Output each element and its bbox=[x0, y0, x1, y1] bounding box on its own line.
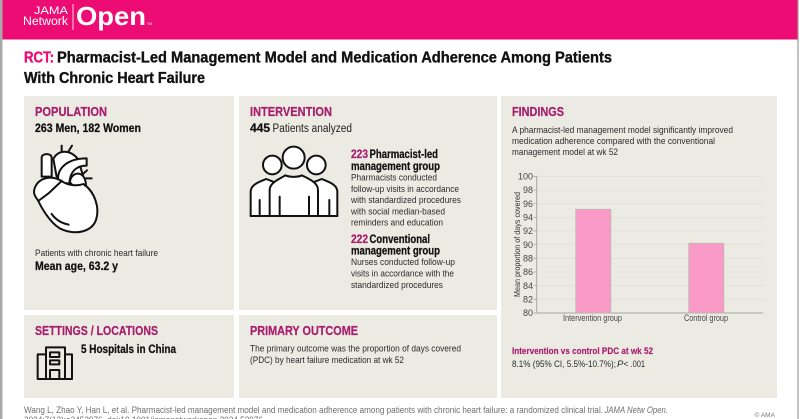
statistic result: .001 bbox=[630, 359, 645, 370]
mean age: Mean age, 63.2 y bbox=[35, 261, 119, 273]
primary outcome text bbox=[250, 344, 461, 366]
conventional group: standardized procedures bbox=[351, 280, 443, 291]
header banner bbox=[2, 0, 798, 40]
patients analyzed: 445 bbox=[250, 123, 271, 135]
y axis labels: 92 bbox=[523, 226, 533, 236]
panel: intervention bbox=[239, 96, 497, 310]
logo: JAMA Network Open: TM bbox=[147, 22, 152, 26]
y axis title: Mean proportion of days covered bbox=[512, 192, 522, 297]
patient description: Patients with chronic heart failure bbox=[35, 248, 158, 259]
y axis labels: 90 bbox=[523, 240, 533, 250]
conventional group: visits in accordance with the bbox=[351, 268, 454, 280]
primary outcome text: The primary outcome was the proportion of days covered bbox=[250, 344, 461, 355]
title bbox=[24, 50, 612, 87]
pharmacist-led group: reminders and education bbox=[351, 218, 443, 229]
pharmacist-led group: 223 bbox=[351, 149, 368, 161]
panel: settings / locations bbox=[24, 315, 234, 398]
bar chart bbox=[512, 172, 763, 323]
conventional group bbox=[351, 234, 455, 291]
findings text: medication adherence compared with the conventional bbox=[512, 136, 715, 147]
heading: primary outcome: PRIMARY OUTCOME bbox=[250, 324, 358, 338]
findings text: A pharmacist-led management model significantly improved bbox=[512, 125, 733, 136]
y axis labels: 84 bbox=[523, 281, 533, 291]
pharmacist-led group: follow-up visits in accordance bbox=[351, 184, 459, 195]
heading: population: POPULATION bbox=[35, 105, 107, 119]
y axis labels: 98 bbox=[523, 185, 533, 195]
pharmacist-led group: Pharmacists conducted bbox=[351, 172, 437, 184]
statistic heading: Intervention vs control PDC at wk 52 bbox=[512, 346, 653, 357]
panel: primary outcome bbox=[239, 315, 497, 398]
hospital count: 5 Hospitals in China bbox=[81, 344, 177, 356]
y axis labels: 94 bbox=[523, 212, 533, 222]
panel: findings bbox=[501, 96, 777, 398]
pharmacist-led group: Pharmacist-led bbox=[370, 149, 438, 161]
population counts: 263 Men, 182 Women bbox=[35, 123, 141, 135]
bar: intervention group bbox=[576, 209, 611, 313]
logo: JAMA Network Open: JAMA bbox=[34, 5, 69, 17]
findings text bbox=[512, 125, 733, 158]
conventional group: 222 bbox=[351, 234, 368, 246]
citation: JAMA Netw Open. bbox=[604, 405, 668, 415]
statistic result: 8.1% (95% CI, 5.5%-10.7%); bbox=[512, 359, 616, 370]
statistic result: < bbox=[624, 359, 629, 370]
icon: hospital bbox=[38, 347, 72, 379]
statistic result: P bbox=[617, 359, 624, 370]
x axis labels bbox=[563, 313, 728, 323]
y axis labels bbox=[518, 172, 533, 318]
bar: control group bbox=[689, 243, 724, 313]
logo: JAMA Network Open: Open bbox=[76, 1, 146, 31]
conventional group: management group bbox=[351, 246, 440, 258]
pharmacist-led group bbox=[350, 149, 461, 229]
findings text: management model at wk 52 bbox=[512, 147, 618, 158]
y axis labels: 96 bbox=[523, 199, 533, 209]
icon: group of people bbox=[251, 147, 337, 216]
heading: findings: FINDINGS bbox=[512, 105, 564, 119]
x axis labels: Intervention group bbox=[563, 313, 622, 323]
logo: JAMA Network Open bbox=[23, 1, 152, 31]
conventional group: Nurses conducted follow-up bbox=[351, 257, 455, 268]
panel: population bbox=[24, 96, 234, 310]
logo: JAMA Network Open: Network bbox=[23, 16, 68, 28]
pharmacist-led group: with social median-based bbox=[350, 206, 445, 218]
y axis labels: 86 bbox=[523, 267, 533, 277]
x axis labels: Control group bbox=[684, 313, 728, 323]
title: With Chronic Heart Failure bbox=[24, 70, 205, 87]
y axis labels: 80 bbox=[523, 308, 533, 318]
citation: Wang L, Zhao Y, Han L, et al. Pharmacist-led management model and medication adherence among patients with chronic heart failure: a randomized clinical trial. bbox=[24, 405, 603, 415]
y axis labels: 88 bbox=[523, 254, 533, 264]
patients analyzed: Patients analyzed bbox=[272, 123, 352, 135]
heading: intervention: INTERVENTION bbox=[250, 105, 332, 119]
primary outcome text: (PDC) by heart failure medication at wk 52 bbox=[250, 355, 404, 366]
title: Pharmacist-Led Management Model and Medication Adherence Among Patients bbox=[57, 50, 612, 66]
pharmacist-led group: management group bbox=[351, 161, 440, 173]
title: RCT: bbox=[24, 50, 54, 66]
y axis labels: 82 bbox=[523, 294, 533, 304]
icon: heart bbox=[34, 146, 97, 232]
y axis labels: 100 bbox=[518, 172, 533, 182]
copyright: © AMA bbox=[754, 411, 776, 419]
conventional group: Conventional bbox=[370, 234, 430, 246]
pharmacist-led group: with standardized procedures bbox=[350, 195, 461, 206]
heading: settings: SETTINGS / LOCATIONS bbox=[35, 324, 158, 338]
